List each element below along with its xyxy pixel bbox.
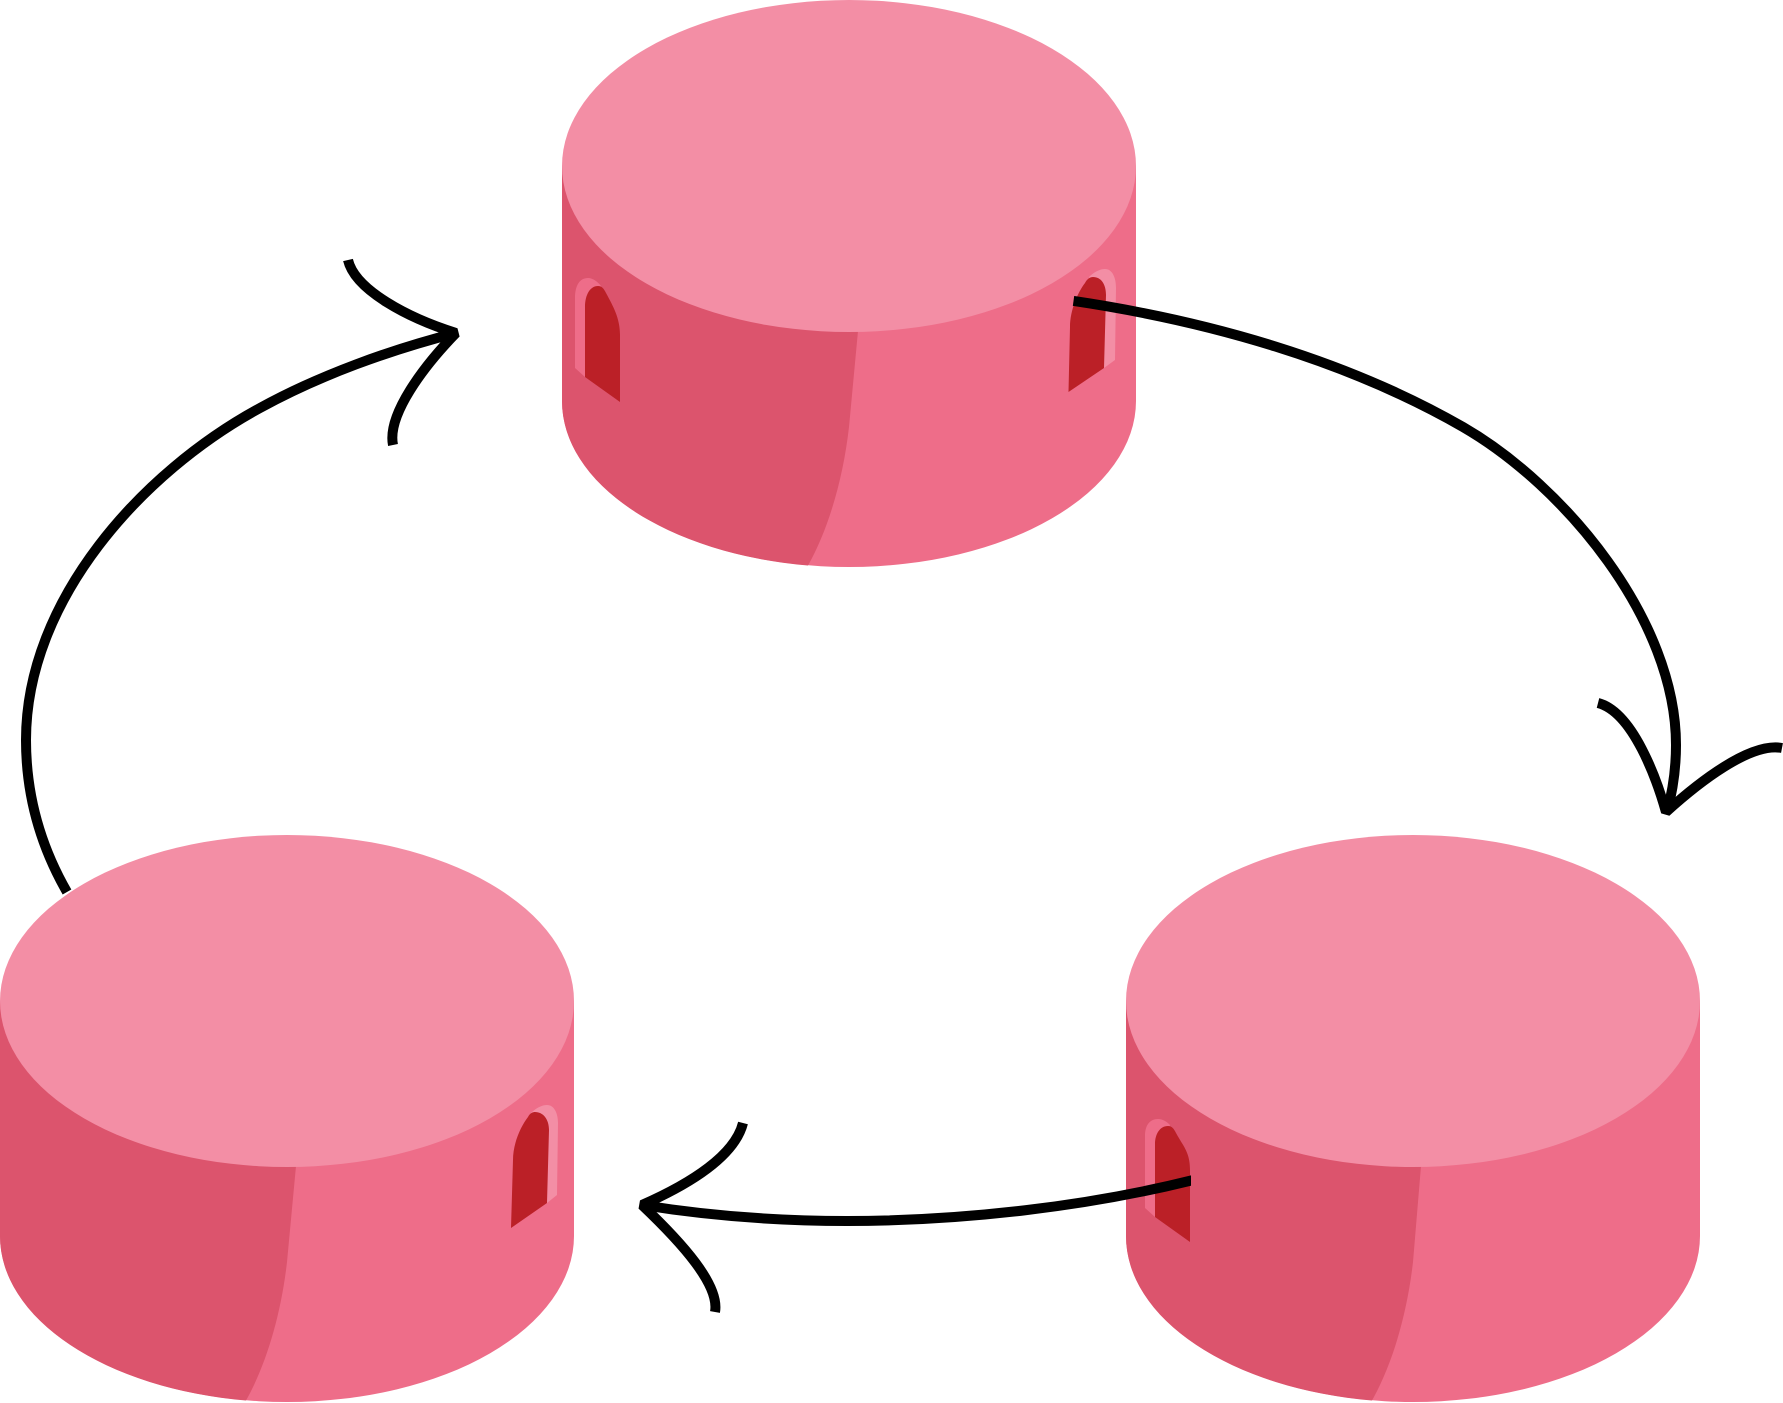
cylinder: top (562, 0, 1136, 567)
top face (1126, 835, 1700, 1167)
arrow: bottom right cylinder to bottom left cylinder (642, 1123, 1205, 1312)
top face (0, 835, 574, 1167)
window: left (575, 278, 620, 402)
window: left (1145, 1119, 1190, 1242)
window: right (1068, 269, 1116, 392)
arrow: bottom left cylinder to top cylinder (26, 260, 456, 892)
top face (562, 0, 1136, 332)
cylinder: bottom left (0, 835, 574, 1402)
cylinder: bottom right (1126, 835, 1700, 1402)
window: right (511, 1105, 558, 1228)
arrow: top cylinder to bottom right cylinder (1060, 299, 1782, 812)
